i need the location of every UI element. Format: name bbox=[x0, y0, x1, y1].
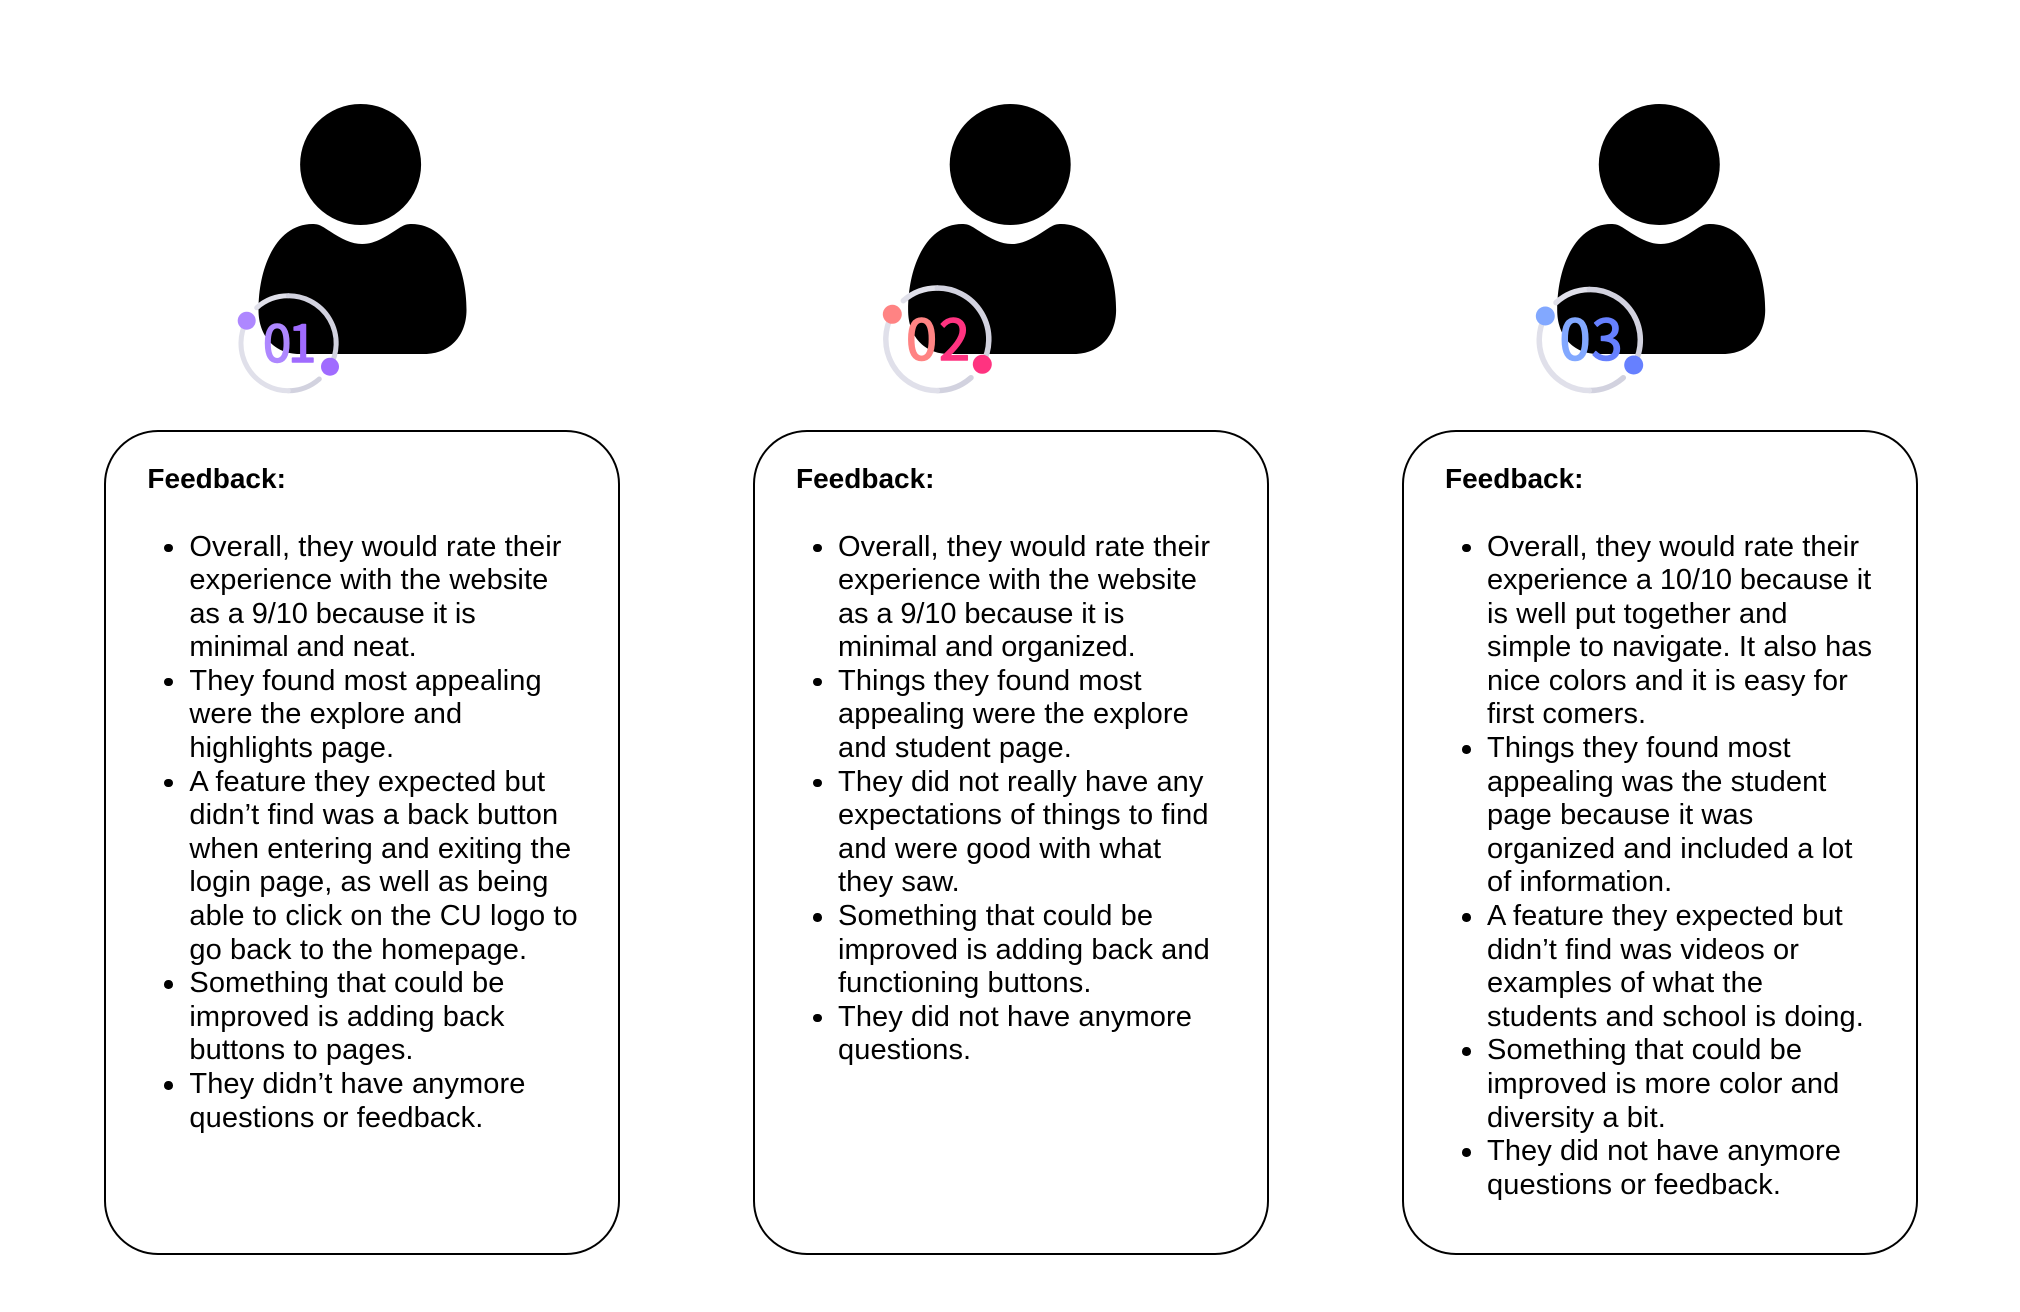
list: feedback 3 points: of information. bbox=[1487, 866, 1672, 898]
list: feedback 1 points: able to click on the CU logo to bbox=[189, 900, 578, 932]
badge: 02 bbox=[883, 288, 992, 391]
list: feedback 2 points: questions. bbox=[838, 1034, 971, 1066]
list: feedback 3 points: A feature they expected but bbox=[1487, 900, 1843, 932]
badge: 01: 1 bbox=[288, 303, 316, 377]
list: feedback 1 points: when entering and exiting the bbox=[189, 833, 571, 865]
list: feedback 3 points: examples of what the bbox=[1487, 967, 1763, 999]
list: feedback 1 points: experience with the website bbox=[189, 564, 548, 596]
panel: feedback 2 bbox=[753, 430, 1269, 1255]
list: feedback 1 points: didn’t find was a back button bbox=[189, 799, 558, 831]
list: feedback 2 points: improved is adding back and bbox=[838, 934, 1210, 966]
list: feedback 2 points: and were good with what bbox=[838, 833, 1161, 865]
badge: 02: 2 bbox=[939, 296, 970, 377]
list: feedback 1 points: questions or feedback. bbox=[189, 1102, 483, 1134]
list: feedback 3 points: improved is more color and bbox=[1487, 1068, 1839, 1100]
list: feedback 1 points: highlights page. bbox=[189, 732, 394, 764]
list: feedback 3 points: simple to navigate. It also has bbox=[1487, 631, 1872, 663]
list: feedback 2 points: expectations of things to find bbox=[838, 799, 1209, 831]
list: feedback 2 points: They did not have anymore bbox=[838, 1001, 1192, 1033]
list: feedback 3 points: didn’t find was videos or bbox=[1487, 934, 1799, 966]
list: feedback 1 points: go back to the homepage. bbox=[189, 934, 527, 966]
icon: user 3 bbox=[1557, 104, 1765, 354]
list: feedback 2 points: functioning buttons. bbox=[838, 967, 1092, 999]
list: feedback 1 points: minimal and neat. bbox=[189, 631, 417, 663]
list: feedback 3 points bbox=[1462, 530, 1872, 1201]
list: feedback 2 points: and student page. bbox=[838, 732, 1072, 764]
badge: 02: 0 bbox=[906, 296, 937, 377]
list: feedback 3 points: first comers. bbox=[1487, 698, 1646, 730]
badge: 03 bbox=[1536, 289, 1643, 391]
heading: feedback 2: Feedback: bbox=[796, 463, 934, 494]
badge: 03: 3 bbox=[1592, 296, 1623, 377]
list: feedback 2 points: Something that could be bbox=[838, 900, 1153, 932]
list: feedback 3 points: nice colors and it is easy for bbox=[1487, 665, 1848, 697]
icon: user 2 bbox=[908, 104, 1116, 354]
list: feedback 2 points: they saw. bbox=[838, 866, 960, 898]
list: feedback 1 points: were the explore and bbox=[189, 698, 462, 730]
panel: feedback 1 bbox=[104, 430, 620, 1255]
list: feedback 3 points: Things they found most bbox=[1487, 732, 1791, 764]
icon: user 1 bbox=[258, 104, 466, 354]
list: feedback 3 points: page because it was bbox=[1487, 799, 1753, 831]
list: feedback 1 points: buttons to pages. bbox=[189, 1034, 414, 1066]
list: feedback 1 points: login page, as well as being bbox=[189, 866, 548, 898]
heading: feedback 3: Feedback: bbox=[1445, 463, 1584, 494]
panel: feedback 3 bbox=[1402, 430, 1918, 1255]
list: feedback 3 points: experience a 10/10 because it bbox=[1487, 564, 1871, 596]
badge: 01: 0 bbox=[263, 303, 291, 377]
list: feedback 1 points: as a 9/10 because it is bbox=[189, 598, 476, 630]
list: feedback 2 points: as a 9/10 because it is bbox=[838, 598, 1124, 630]
list: feedback 1 points: They found most appealing bbox=[189, 665, 542, 697]
list: feedback 1 points bbox=[164, 530, 578, 1134]
list: feedback 3 points: is well put together and bbox=[1487, 598, 1788, 630]
list: feedback 3 points: They did not have anymore bbox=[1487, 1135, 1841, 1167]
list: feedback 1 points: improved is adding back bbox=[189, 1001, 504, 1033]
list: feedback 1 points: They didn’t have anymore bbox=[189, 1068, 525, 1100]
list: feedback 2 points bbox=[813, 530, 1210, 1066]
list: feedback 1 points: A feature they expected but bbox=[189, 766, 545, 798]
list: feedback 3 points: students and school is doing. bbox=[1487, 1001, 1864, 1033]
badge: 01 bbox=[238, 296, 339, 391]
list: feedback 3 points: diversity a bit. bbox=[1487, 1102, 1666, 1134]
heading: feedback 1: Feedback: bbox=[147, 463, 286, 494]
list: feedback 2 points: Things they found most bbox=[838, 665, 1142, 697]
list: feedback 3 points: organized and included a lot bbox=[1487, 833, 1853, 865]
list: feedback 3 points: appealing was the student bbox=[1487, 766, 1826, 798]
list: feedback 3 points: Something that could be bbox=[1487, 1034, 1802, 1066]
list: feedback 2 points: appealing were the explore bbox=[838, 698, 1189, 730]
list: feedback 3 points: questions or feedback. bbox=[1487, 1169, 1781, 1201]
list: feedback 2 points: experience with the website bbox=[838, 564, 1197, 596]
badge: 03: 0 bbox=[1560, 296, 1591, 377]
list: feedback 2 points: They did not really have any bbox=[838, 766, 1204, 798]
list: feedback 1 points: Something that could be bbox=[189, 967, 504, 999]
list: feedback 2 points: minimal and organized. bbox=[838, 631, 1136, 663]
list: feedback 1 points: Overall, they would rate their bbox=[189, 530, 562, 562]
list: feedback 2 points: Overall, they would rate their bbox=[838, 530, 1210, 562]
list: feedback 3 points: Overall, they would rate their bbox=[1487, 530, 1859, 562]
